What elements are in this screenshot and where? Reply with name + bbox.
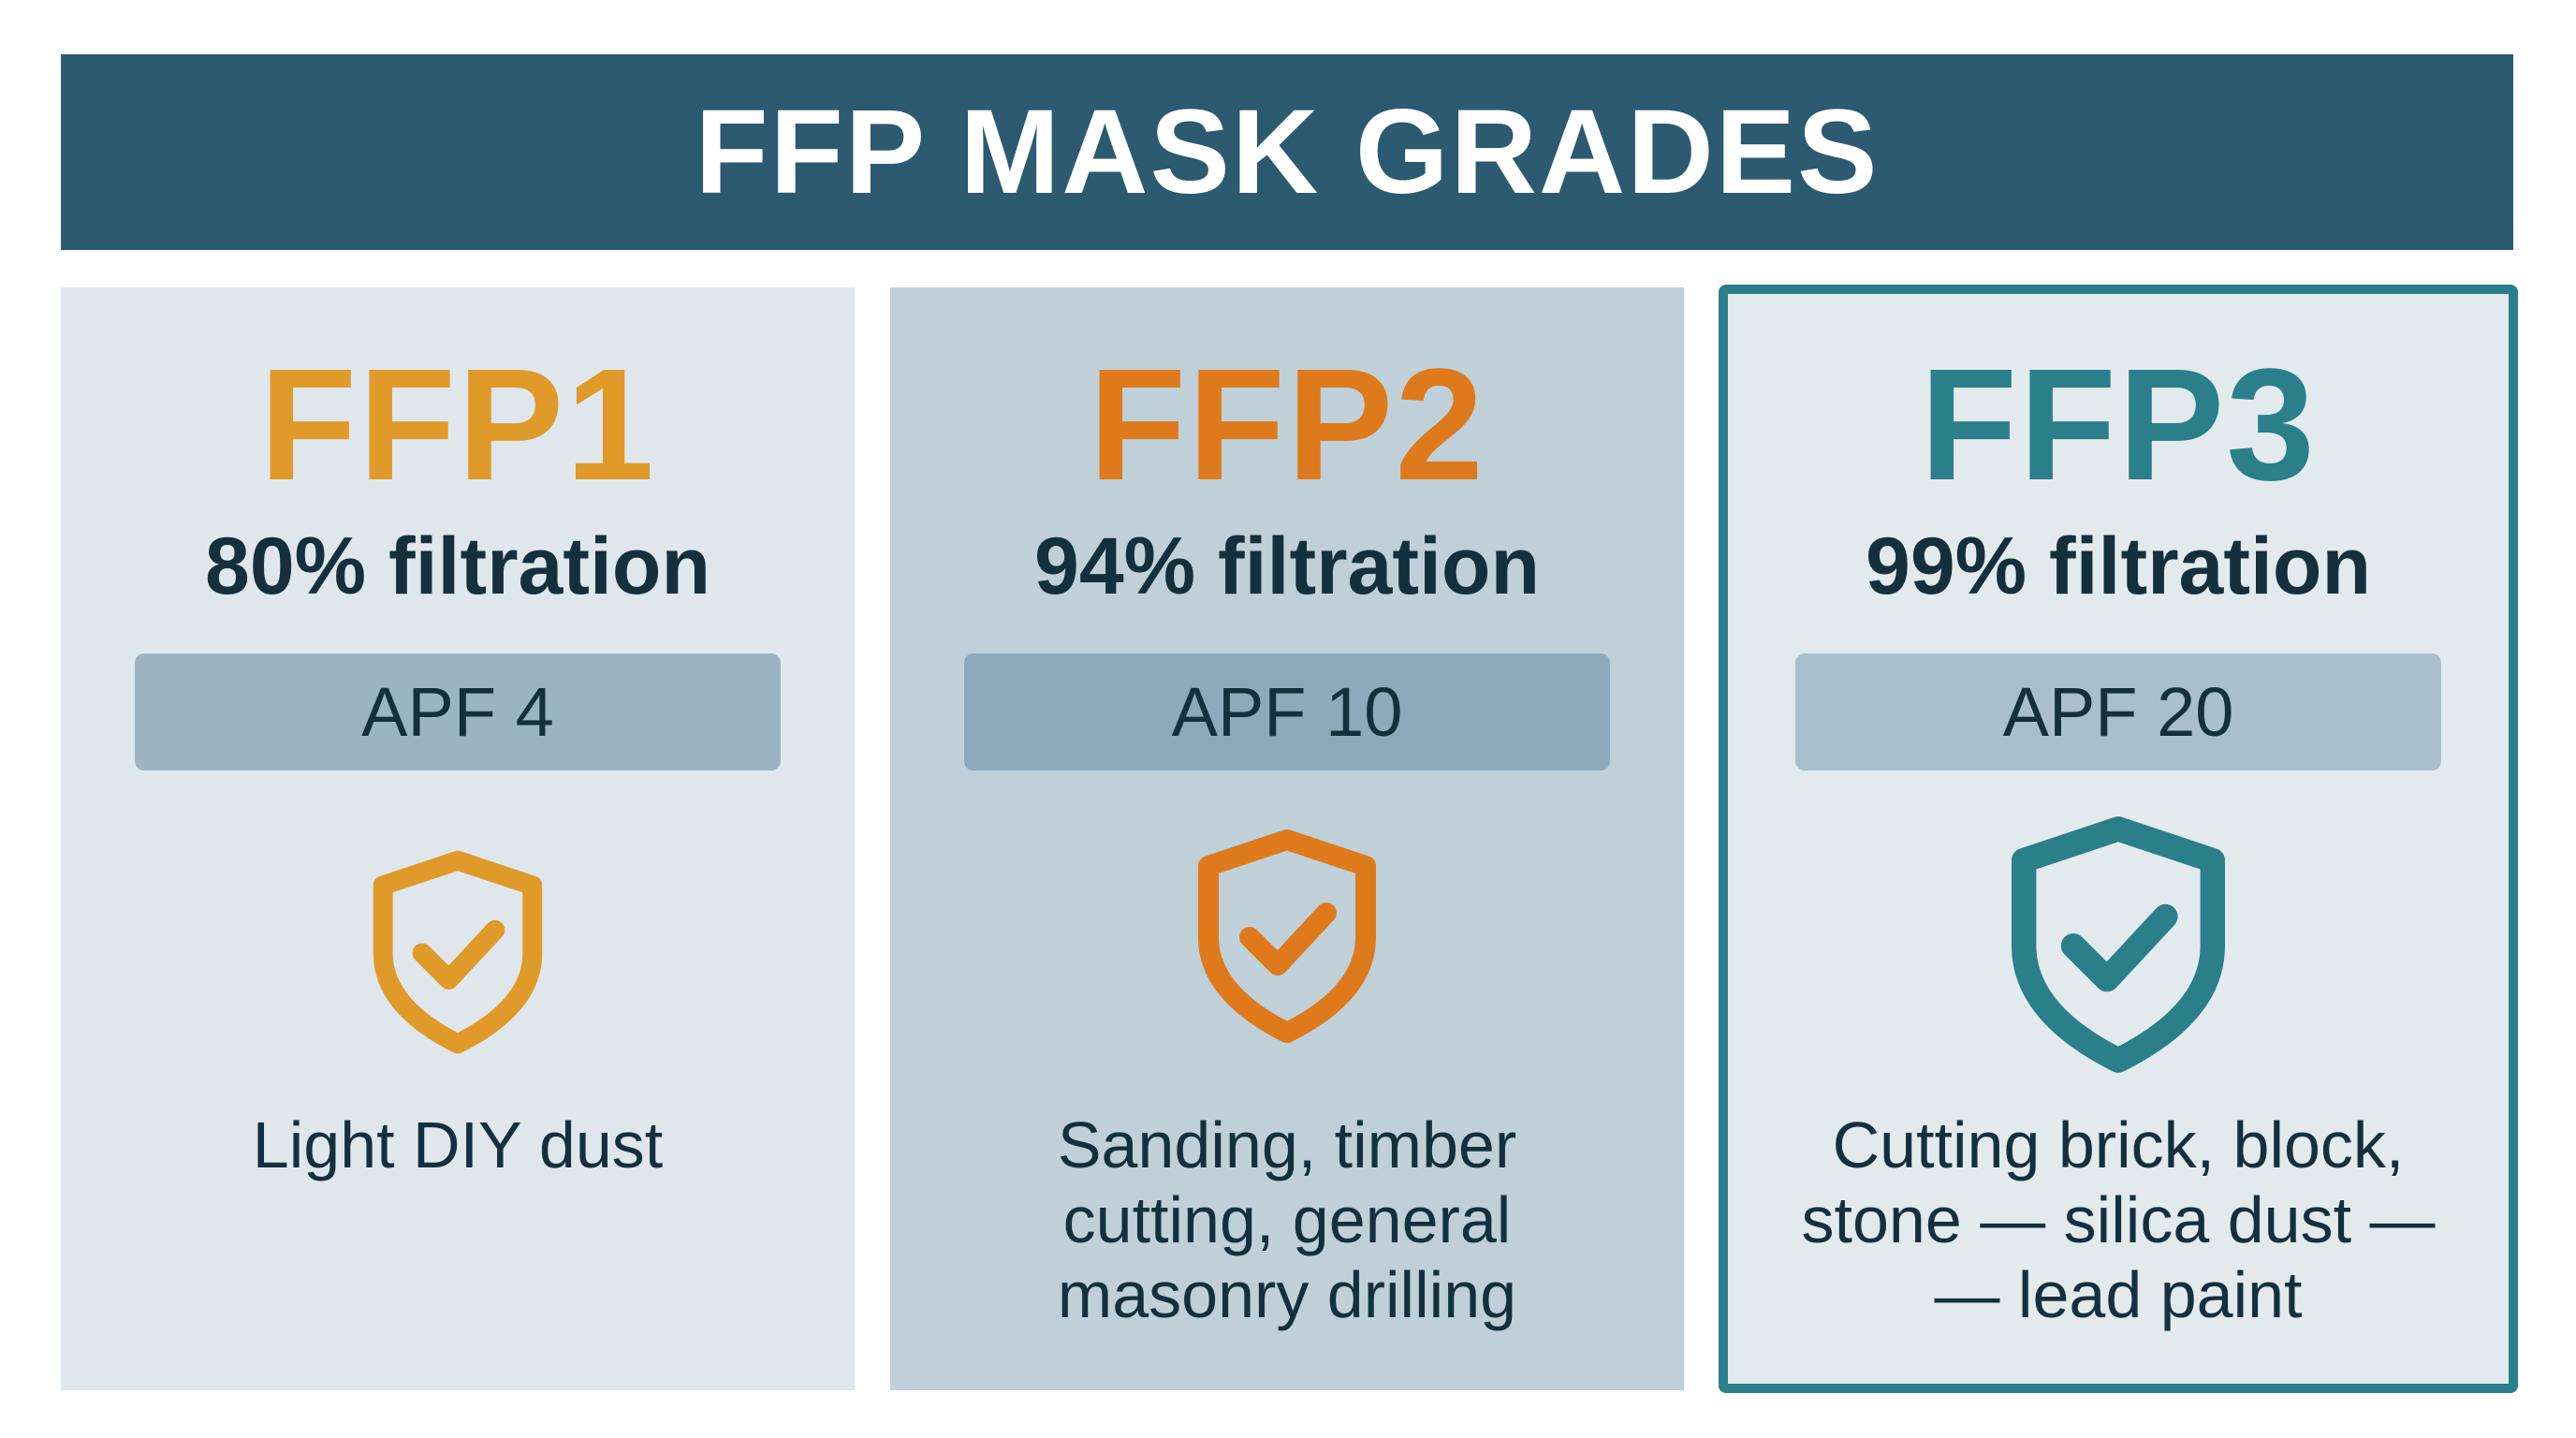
badge: APF 10: APF 10 (1172, 673, 1402, 751)
text: uses (1058, 1108, 1516, 1331)
badge: APF 4 (135, 653, 781, 770)
panel: FFP1 (61, 287, 855, 1390)
heading: FFP3: FFP3 (1920, 336, 2317, 514)
text: use: Light DIY dust (253, 1108, 663, 1181)
icon: shield check (1198, 829, 1376, 1043)
icon: shield check (2012, 816, 2225, 1073)
heading: FFP1: FFP1 (259, 336, 656, 514)
text: 80% filtration: 80% filtration (205, 521, 710, 611)
heading: FFP2: FFP2 (1089, 336, 1486, 514)
badge: APF 20 (1795, 653, 2441, 770)
text: 99% filtration: 99% filtration (1866, 521, 2371, 611)
text: 94% filtration: 94% filtration (1034, 521, 1540, 611)
icon: shield check (373, 850, 543, 1054)
text: uses: Cutting brick, block, (1833, 1108, 2404, 1181)
panel: FFP2 (890, 287, 1684, 1390)
text: uses: Sanding, timber (1058, 1108, 1516, 1181)
title: FFP MASK GRADES (695, 85, 1880, 219)
badge: APF 4: APF 4 (361, 673, 554, 751)
panel: FFP3 (1719, 285, 2518, 1393)
title (61, 54, 2513, 250)
badge: APF 20: APF 20 (2003, 673, 2233, 751)
badge: APF 10 (964, 653, 1610, 770)
text: uses: — lead paint (1934, 1258, 2303, 1331)
text: uses (1802, 1108, 2436, 1331)
text: uses: cutting, general (1063, 1183, 1511, 1256)
text: uses: stone — silica dust — (1802, 1183, 2435, 1256)
text: uses: masonry drilling (1058, 1258, 1516, 1331)
